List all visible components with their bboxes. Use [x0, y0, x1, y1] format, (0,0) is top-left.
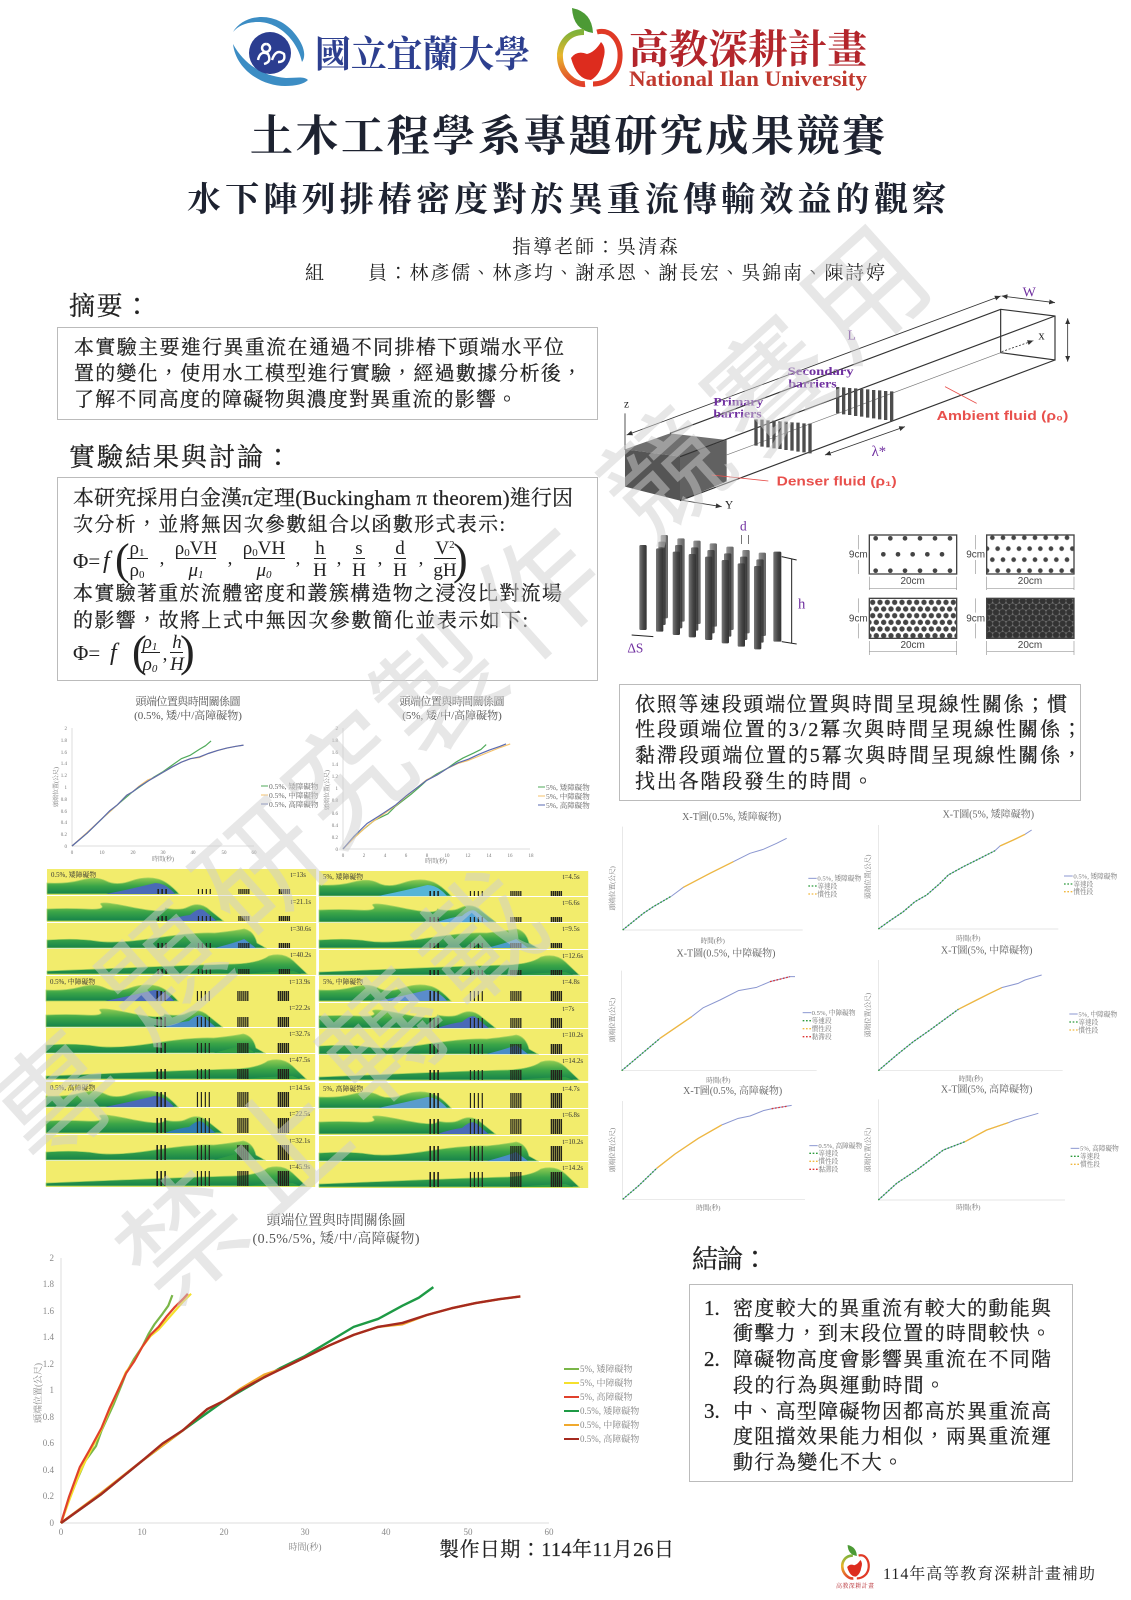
flow visualisation: 5% density image strips: t=4.7s	[563, 1085, 580, 1093]
chart: head position 0.5%: 50	[222, 851, 227, 856]
chart: head position 5%: 5%, 中障礙物	[546, 791, 590, 801]
chart: X-T 5% short: 時間(秒)	[956, 933, 981, 942]
chart: head position 0.5%: 40	[190, 851, 196, 856]
diagram: pile plan layouts: 20cm	[1018, 640, 1042, 651]
formula: full dimensionless groups: h	[315, 538, 325, 559]
formula: simplified: ,	[163, 644, 167, 665]
chart: head position 5%: 0.8	[332, 799, 338, 804]
chart: combined head position vs time: 0.6	[43, 1438, 54, 1448]
chart: head position 5%: 6	[405, 854, 408, 859]
formula: full dimensionless groups: VH	[190, 538, 217, 559]
watermark: 轉	[273, 926, 483, 1139]
chart: X-T 5% medium: 慣性段	[1078, 1025, 1099, 1034]
diagram: flume experiment setup: z	[624, 398, 629, 410]
flow visualisation: 5% density image strips: t=14.2s	[563, 1057, 583, 1065]
formula: full dimensionless groups: ,	[160, 548, 164, 569]
chart: head position 0.5%: 0.4	[61, 821, 68, 826]
chart: combined head position vs time: (0.5%/5%, 矮/中/高障礙物)	[252, 1230, 420, 1247]
formula: simplified: ρ	[143, 654, 152, 675]
chart: combined head position vs time: 1.4	[43, 1332, 54, 1342]
chart: combined head position vs time: 60	[544, 1527, 554, 1537]
chart: head position 0.5%: 1.8	[61, 739, 68, 744]
chart: head position 5%: 4	[384, 854, 387, 859]
panel: linear relationships text: 依照等速段頭端位置與時間呈現線性關係；慣	[635, 693, 1068, 716]
formula: full dimensionless groups: ,	[337, 548, 341, 569]
heading: conclusion: 結論：	[692, 1245, 768, 1274]
diagram: pile plan layouts: 20cm	[900, 640, 925, 651]
formula: full dimensionless groups: 0	[252, 547, 258, 559]
diagram: pile array geometry: h	[798, 596, 806, 612]
panel: linear relationships text	[620, 684, 1082, 800]
diagram: flume experiment setup: Denser fluid (ρ₁)	[777, 474, 897, 489]
flow visualisation: 0.5% density image strips: 0.5%, 中障礙物	[50, 977, 95, 986]
title: 土木工程學系專題研究成果競賽	[250, 113, 888, 161]
chart: head position 0.5%: 60	[252, 851, 257, 856]
formula: full dimensionless groups: μ	[188, 560, 198, 581]
formula: full dimensionless groups: )	[453, 535, 468, 584]
watermark: 究	[238, 666, 448, 879]
chart: head position 0.5%: (0.5%, 矮/中/高障礙物)	[134, 708, 242, 722]
diagram: pile array geometry	[627, 519, 806, 656]
chart legend: 5%, 高障礙物	[580, 1391, 632, 1402]
chart: combined head position vs time: 0	[59, 1527, 64, 1537]
flow visualisation: 0.5% density image strips: t=14.5s	[290, 1084, 310, 1092]
flow visualisation: 5% density image strips: 5%, 高障礙物	[323, 1084, 363, 1093]
chart: X-T 0.5% tall: 0.5%, 高障礙物	[818, 1141, 862, 1150]
chart: X-T 5% tall: 頭端位置(公尺)	[863, 1128, 872, 1172]
chart: head position 5%: 1.2	[332, 775, 338, 780]
chart: head position 5%: 10	[444, 854, 450, 859]
chart: combined head position vs time: 1	[50, 1385, 54, 1395]
panel: dimensional analysis: 次分析，並將無因次參數組合以函數形式表示:	[73, 513, 505, 536]
chart: X-T 0.5% medium: 0.5%, 中障礙物	[812, 1008, 856, 1017]
chart: head position 0.5%: 0.5%, 高障礙物	[269, 799, 319, 809]
chart: X-T 0.5% medium: X-T圖(0.5%, 中障礙物)	[676, 947, 775, 960]
chart: head position 0.5%: 1	[64, 786, 68, 791]
chart: X-T 0.5% short: 頭端位置(公尺)	[607, 866, 616, 911]
chart: head position 5%: 0.2	[332, 836, 338, 841]
chart group: X-T charts	[607, 808, 1119, 1212]
formula: simplified: 0	[152, 663, 158, 675]
chart: head position 5%: 16	[508, 854, 513, 859]
flow visualisation: 0.5% density image strips: t=21.1s	[291, 898, 311, 906]
chart: combined head position vs time	[32, 1212, 639, 1552]
panel: linear relationships text: 性段頭端位置的3/2冪次與時間呈現線性關係；	[635, 718, 1082, 741]
chart: X-T 5% short: 慣性段	[1073, 887, 1094, 896]
chart: head position 0.5%: 20	[130, 851, 136, 856]
watermark	[0, 180, 963, 1339]
chart: head position 5%: 5%, 高障礙物	[546, 800, 590, 810]
chart: head position 5%: 1.8	[332, 739, 338, 744]
chart: X-T 0.5% short: 慣性段	[817, 889, 838, 898]
panel: conclusion: 段的行為與運動時間。	[733, 1374, 945, 1397]
chart: X-T 5% tall	[863, 1083, 1119, 1211]
chart: head position 5%: 時間(秒)	[425, 857, 447, 865]
diagram: pile array geometry: d	[740, 519, 747, 534]
panel: conclusion: 2.	[704, 1347, 720, 1371]
chart: X-T 0.5% short: 時間(秒)	[700, 936, 725, 945]
diagram: pile plan layouts: 20cm	[1018, 576, 1042, 587]
chart: head position 0.5%: 0.8	[61, 798, 68, 803]
chart: X-T 5% medium: 等速段	[1078, 1017, 1099, 1026]
panel: linear relationships text: 找出各階段發生的時間。	[635, 770, 873, 793]
diagram: flume experiment setup: Ambient fluid (ρ₀)	[937, 408, 1068, 423]
chart: X-T 0.5% medium	[607, 947, 856, 1084]
flow visualisation: 0.5% density image strips: t=32.7s	[290, 1030, 310, 1038]
logo: higher education sprout project	[560, 8, 867, 91]
production date: 製作日期：114年11月26日	[439, 1538, 674, 1561]
chart: head position 5%: 5%, 矮障礙物	[546, 782, 590, 792]
flow visualisation: 5% density image strips	[319, 871, 588, 1188]
chart: head position 5%: 頭端位置(公尺)	[323, 770, 331, 810]
chart: head position 0.5%: 1.2	[61, 774, 68, 779]
chart: X-T 5% tall: X-T圖(5%, 高障礙物)	[941, 1083, 1032, 1096]
chart: combined head position vs time: 1.8	[43, 1279, 54, 1289]
chart: combined head position vs time: 0.4	[43, 1465, 54, 1475]
diagram: pile plan layouts: 9cm	[849, 613, 868, 624]
chart: combined head position vs time: 頭端位置(公尺)	[32, 1363, 43, 1423]
chart legend	[564, 1363, 639, 1444]
chart: X-T 5% medium: X-T圖(5%, 中障礙物)	[941, 943, 1032, 956]
logo: higher education sprout project: National Ilan University	[629, 66, 867, 91]
panel: dimensional analysis: 本實驗著重於流體密度和叢簇構造物之浸沒比對流場	[73, 582, 562, 605]
chart: combined head position vs time: 10	[138, 1527, 147, 1537]
watermark: 題	[53, 861, 263, 1074]
chart: X-T 0.5% short: 0.5%, 矮障礙物	[817, 874, 861, 883]
panel: abstract: 置的變化，使用水工模型進行實驗，經過數據分析後，	[74, 362, 582, 385]
flow visualisation: 0.5% density image strips: t=47.5s	[290, 1056, 310, 1064]
panel: dimensional analysis: 本研究採用白金漢π定理(Buckingham π theorem)進行因	[73, 486, 573, 510]
chart: head position 0.5%: 0.5%, 矮障礙物	[269, 781, 319, 791]
flow visualisation: 5% density image strips: t=4.5s	[563, 873, 580, 881]
formula: simplified: f	[110, 640, 120, 666]
panel: conclusion: 1.	[704, 1296, 720, 1320]
panel: linear relationships text: 黏滯段頭端位置的5冪次與時間呈現線性關係，	[635, 744, 1082, 767]
flow visualisation: 5% density image strips: t=12.6s	[563, 952, 583, 960]
formula: full dimensionless groups: ,	[419, 548, 423, 569]
diagram: pile plan layouts: 9cm	[966, 613, 985, 624]
diagram: pile plan layouts: 9cm	[966, 550, 985, 561]
chart: X-T 5% short: 等速段	[1073, 879, 1094, 888]
chart: head position 5%: 2	[336, 727, 338, 732]
funding logo	[836, 1545, 874, 1590]
chart: head position 5%: 12	[466, 854, 471, 859]
chart: head position 0.5%: 0	[64, 845, 68, 850]
chart: head position 5%: 2	[363, 854, 366, 859]
flow visualisation: 0.5% density image strips: t=32.1s	[290, 1137, 310, 1145]
chart: head position 5%: 1	[336, 787, 338, 792]
logo: National Ilan University	[233, 17, 530, 86]
chart: X-T 0.5% medium: 黏滯段	[812, 1032, 832, 1041]
watermark: 用	[753, 180, 963, 393]
chart: X-T 5% tall: 時間(秒)	[956, 1202, 981, 1211]
heading: results and discussion: 實驗結果與討論：	[69, 443, 291, 472]
formula: full dimensionless groups: ρ	[130, 560, 139, 581]
chart: X-T 0.5% medium: 時間(秒)	[706, 1075, 731, 1084]
chart: head position 0.5%: 0.5%, 中障礙物	[269, 790, 319, 800]
chart: head position 5%: 頭端位置與時間關係圖	[400, 694, 504, 708]
watermark: 禁	[73, 1126, 283, 1339]
chart: head position 5%: 0	[342, 854, 345, 859]
panel: conclusion: 衝擊力，到末段位置的時間較快。	[733, 1322, 1051, 1345]
chart: head position 5%: 8	[426, 854, 429, 859]
chart: X-T 0.5% tall: 時間(秒)	[696, 1203, 721, 1212]
formula: simplified	[73, 627, 195, 676]
flow visualisation: 0.5% density image strips: 0.5%, 高障礙物	[50, 1083, 95, 1092]
chart: X-T 5% medium	[863, 943, 1117, 1083]
panel: abstract: 本實驗主要進行異重流在通過不同排椿下頭端水平位	[74, 336, 564, 359]
diagram: flume experiment setup: λ*	[872, 444, 886, 460]
flow visualisation: 0.5% density image strips: 0.5%, 矮障礙物	[51, 870, 96, 879]
heading: abstract: 摘要：	[69, 292, 150, 321]
chart: head position 0.5%: 1.4	[61, 762, 68, 767]
diagram: pile array geometry: ΔS	[627, 641, 643, 656]
diagram: flume experiment setup	[624, 286, 1068, 511]
logo: National Ilan University: 國立宜蘭大學	[315, 34, 530, 76]
chart: combined head position vs time: 50	[464, 1527, 473, 1537]
diagram: flume experiment setup: Secondary	[788, 364, 854, 378]
chart: X-T 5% medium: 5%, 中障礙物	[1078, 1009, 1117, 1018]
formula: full dimensionless groups: ,	[378, 548, 382, 569]
flow visualisation: 5% density image strips: t=10.2s	[563, 1031, 583, 1039]
chart: head position 0.5%: 頭端位置(公尺)	[52, 767, 60, 807]
formula: full dimensionless groups: 2	[449, 539, 455, 551]
formula: full dimensionless groups	[73, 535, 468, 584]
diagram: flume experiment setup: x	[1038, 328, 1045, 342]
chart: X-T 5% tall: 慣性段	[1080, 1160, 1100, 1169]
chart: head position 5%: 1.6	[332, 751, 338, 756]
formula: full dimensionless groups: Φ=	[73, 549, 100, 573]
chart: head position 0.5%: 0.6	[61, 810, 68, 815]
chart: X-T 0.5% short: 等速段	[817, 881, 838, 890]
flow visualisation: 0.5% density image strips: t=45.9s	[290, 1163, 310, 1171]
chart: X-T 0.5% tall: 黏滯段	[818, 1165, 839, 1174]
formula: simplified: Φ=	[73, 641, 100, 665]
chart: X-T 5% short: 頭端位置(公尺)	[863, 854, 872, 899]
formula: full dimensionless groups: V	[435, 538, 449, 559]
formula: full dimensionless groups: ,	[228, 548, 232, 569]
formula: full dimensionless groups: (	[115, 535, 130, 584]
flow visualisation: 5% density image strips: t=6.6s	[563, 899, 580, 907]
chart: X-T 0.5% tall: 慣性段	[818, 1157, 839, 1166]
watermark: 載	[368, 826, 578, 1039]
chart legend: 0.5%, 高障礙物	[580, 1433, 639, 1444]
formula: simplified: ρ	[143, 632, 152, 653]
flow visualisation: 0.5% density image strips: t=22.2s	[290, 1004, 310, 1012]
flow visualisation: 0.5% density image strips: t=22.5s	[290, 1110, 310, 1118]
diagram: flume experiment setup: Y	[725, 499, 733, 511]
chart: X-T 0.5% tall: 頭端位置(公尺)	[607, 1128, 616, 1172]
chart: head position 0.5%: 1.6	[61, 751, 68, 756]
chart: X-T 5% medium: 時間(秒)	[958, 1074, 983, 1083]
formula: full dimensionless groups: H	[352, 560, 366, 581]
diagram: pile plan layouts: 20cm	[900, 576, 925, 587]
watermark: 研	[150, 756, 360, 969]
chart: head position 5%	[323, 694, 590, 865]
diagram: pile plan layouts: 9cm	[849, 550, 868, 561]
chart: head position 5%: 14	[486, 854, 492, 859]
panel: conclusion: 密度較大的異重流有較大的動能與	[733, 1297, 1052, 1320]
formula: simplified: )	[180, 627, 195, 676]
formula: simplified: 1	[152, 641, 157, 653]
panel: conclusion: 動行為變化不大。	[733, 1451, 903, 1474]
advisor: 指導老師：吳清森	[512, 236, 678, 258]
chart: X-T 0.5% medium: 等速段	[812, 1016, 832, 1025]
formula: full dimensionless groups: H	[393, 560, 407, 581]
team members: 員：林彥儒、林彥均、謝承恩、謝長宏、吳錦南、陳詩婷	[368, 262, 885, 284]
panel: conclusion: 中、高型障礙物因都高於異重流高	[733, 1400, 1051, 1423]
flow visualisation: 5% density image strips: t=9.5s	[563, 925, 580, 933]
watermark: 賽	[660, 274, 870, 487]
flow visualisation: 0.5% density image strips: t=13.9s	[290, 978, 310, 986]
formula: full dimensionless groups: ρ	[130, 538, 139, 559]
panel: conclusion: 障礙物高度會影響異重流在不同階	[733, 1348, 1051, 1371]
subtitle: 水下陣列排椿密度對於異重流傳輸效益的觀察	[187, 181, 946, 219]
flow visualisation: 5% density image strips: t=14.2s	[563, 1164, 583, 1172]
chart: head position 0.5%: 10	[100, 851, 105, 856]
formula: full dimensionless groups: s	[355, 538, 363, 559]
formula: full dimensionless groups: μ	[256, 560, 266, 581]
chart: head position 0.5%: 2	[64, 727, 68, 732]
chart: X-T 5% short: X-T圖(5%, 矮障礙物)	[943, 808, 1034, 821]
chart: head position 0.5%: 30	[160, 851, 166, 856]
formula: full dimensionless groups: 1	[139, 547, 144, 559]
chart: combined head position vs time: 頭端位置與時間關係圖	[266, 1212, 406, 1229]
chart: X-T 0.5% short	[607, 810, 861, 945]
diagram: pile plan layouts	[849, 535, 1074, 655]
funding logo: 高教深耕計畫	[836, 1582, 874, 1590]
chart: head position 0.5%	[52, 694, 319, 863]
chart: X-T 5% medium: 頭端位置(公尺)	[863, 993, 872, 1037]
panel: dimensional analysis	[58, 478, 598, 680]
diagram: flume experiment setup: L	[847, 328, 856, 343]
formula: full dimensionless groups: d	[395, 538, 405, 559]
chart: head position 5%: 1.4	[332, 763, 338, 768]
chart: combined head position vs time: 0.2	[43, 1491, 54, 1501]
chart: combined head position vs time: 2	[50, 1253, 54, 1263]
watermark: 製	[328, 576, 538, 789]
chart: head position 5%: 0.6	[332, 812, 338, 817]
chart: head position 5%: 18	[528, 854, 534, 859]
formula: full dimensionless groups: 0	[266, 569, 272, 581]
watermark: 作	[428, 481, 638, 694]
flow visualisation: 0.5% density image strips: t=40.2s	[291, 951, 311, 959]
flow visualisation: 5% density image strips: 5%, 矮障礙物	[323, 872, 363, 881]
team members: 組	[305, 262, 324, 284]
chart: X-T 0.5% tall: X-T圖(0.5%, 高障礙物)	[683, 1084, 782, 1097]
chart: X-T 0.5% short: X-T圖(0.5%, 矮障礙物)	[682, 810, 781, 823]
chart: combined head position vs time: 0.8	[43, 1412, 54, 1422]
diagram: flume experiment setup: W	[1023, 286, 1037, 301]
panel: abstract	[58, 328, 598, 420]
chart: X-T 0.5% tall: 等速段	[818, 1149, 839, 1158]
watermark: 止	[173, 1036, 383, 1249]
formula: full dimensionless groups: H	[313, 560, 327, 581]
chart legend: 0.5%, 矮障礙物	[580, 1405, 639, 1416]
funding note: 114年高等教育深耕計畫補助	[883, 1564, 1095, 1583]
chart legend: 5%, 矮障礙物	[580, 1363, 632, 1374]
chart: head position 5%: 0.4	[332, 824, 338, 829]
panel: conclusion: 3.	[704, 1399, 720, 1423]
panel: abstract: 了解不同高度的障礙物與濃度對異重流的影響。	[74, 388, 517, 411]
chart: head position 0.5%: 0.2	[61, 833, 68, 838]
chart legend: 0.5%, 中障礙物	[580, 1419, 639, 1430]
panel: dimensional analysis: 的影響，故將上式中無因次參數簡化並表示如下:	[73, 609, 528, 632]
chart: X-T 0.5% tall	[607, 1084, 862, 1212]
chart: head position 5%: (5%, 矮/中/高障礙物)	[402, 708, 502, 722]
formula: full dimensionless groups: gH	[433, 560, 457, 581]
watermark: 競	[555, 362, 765, 575]
formula: simplified: h	[172, 632, 182, 653]
chart: head position 0.5%: 0	[71, 851, 74, 856]
chart: combined head position vs time: 40	[382, 1527, 391, 1537]
chart: X-T 5% tall: 等速段	[1080, 1152, 1100, 1161]
formula: full dimensionless groups: VH	[258, 538, 285, 559]
logo: higher education sprout project: 高教深耕計畫	[629, 27, 867, 72]
flow visualisation: 5% density image strips: t=4.8s	[563, 978, 580, 986]
formula: simplified: H	[169, 654, 185, 675]
chart: combined head position vs time: 1.6	[43, 1306, 54, 1316]
formula: full dimensionless groups: 1	[198, 569, 204, 581]
chart: head position 0.5%: 時間(秒)	[152, 855, 174, 863]
chart: X-T 5% short: 0.5%, 矮障礙物	[1073, 871, 1117, 880]
flow visualisation: 5% density image strips: t=6.8s	[563, 1111, 580, 1119]
flow visualisation: 0.5% density image strips: t=30.6s	[291, 925, 311, 933]
diagram: flume experiment setup: barriers	[788, 376, 837, 390]
formula: full dimensionless groups: ,	[296, 548, 300, 569]
chart: combined head position vs time: 1.2	[43, 1359, 54, 1369]
chart: X-T 5% tall: 5%, 高障礙物	[1080, 1144, 1119, 1153]
chart: X-T 0.5% medium: 頭端位置(公尺)	[607, 998, 616, 1042]
chart: combined head position vs time: 30	[300, 1527, 310, 1537]
chart: combined head position vs time: 20	[220, 1527, 229, 1537]
flow visualisation: 0.5% density image strips: t=13s	[291, 871, 306, 879]
flow visualisation: 5% density image strips: 5%, 中障礙物	[323, 977, 363, 986]
chart legend: 5%, 中障礙物	[580, 1377, 632, 1388]
formula: full dimensionless groups: 0	[184, 547, 190, 559]
flow visualisation: 0.5% density image strips	[46, 869, 316, 1187]
panel: conclusion	[690, 1284, 1072, 1482]
formula: full dimensionless groups: ρ	[175, 538, 184, 559]
panel: conclusion: 度阻擋效果能力相似，兩異重流運	[733, 1425, 1051, 1448]
formula: full dimensionless groups: f	[103, 548, 113, 574]
flow visualisation: 5% density image strips: t=10.2s	[563, 1138, 583, 1146]
chart: head position 0.5%: 頭端位置與時間關係圖	[136, 694, 240, 708]
formula: full dimensionless groups: 0	[139, 569, 145, 581]
chart: head position 5%: 0	[336, 848, 338, 853]
chart: X-T 0.5% medium: 慣性段	[812, 1024, 832, 1033]
chart: combined head position vs time: 時間(秒)	[288, 1541, 322, 1552]
formula: simplified: (	[132, 627, 147, 676]
chart: X-T 5% short	[863, 808, 1117, 942]
flow visualisation: 5% density image strips: t=7s	[563, 1005, 575, 1013]
diagram: flume experiment setup: barriers	[713, 407, 762, 421]
formula: full dimensionless groups: ρ	[243, 538, 252, 559]
diagram: flume experiment setup: Primary	[713, 394, 763, 408]
chart: combined head position vs time: 0	[50, 1518, 54, 1528]
